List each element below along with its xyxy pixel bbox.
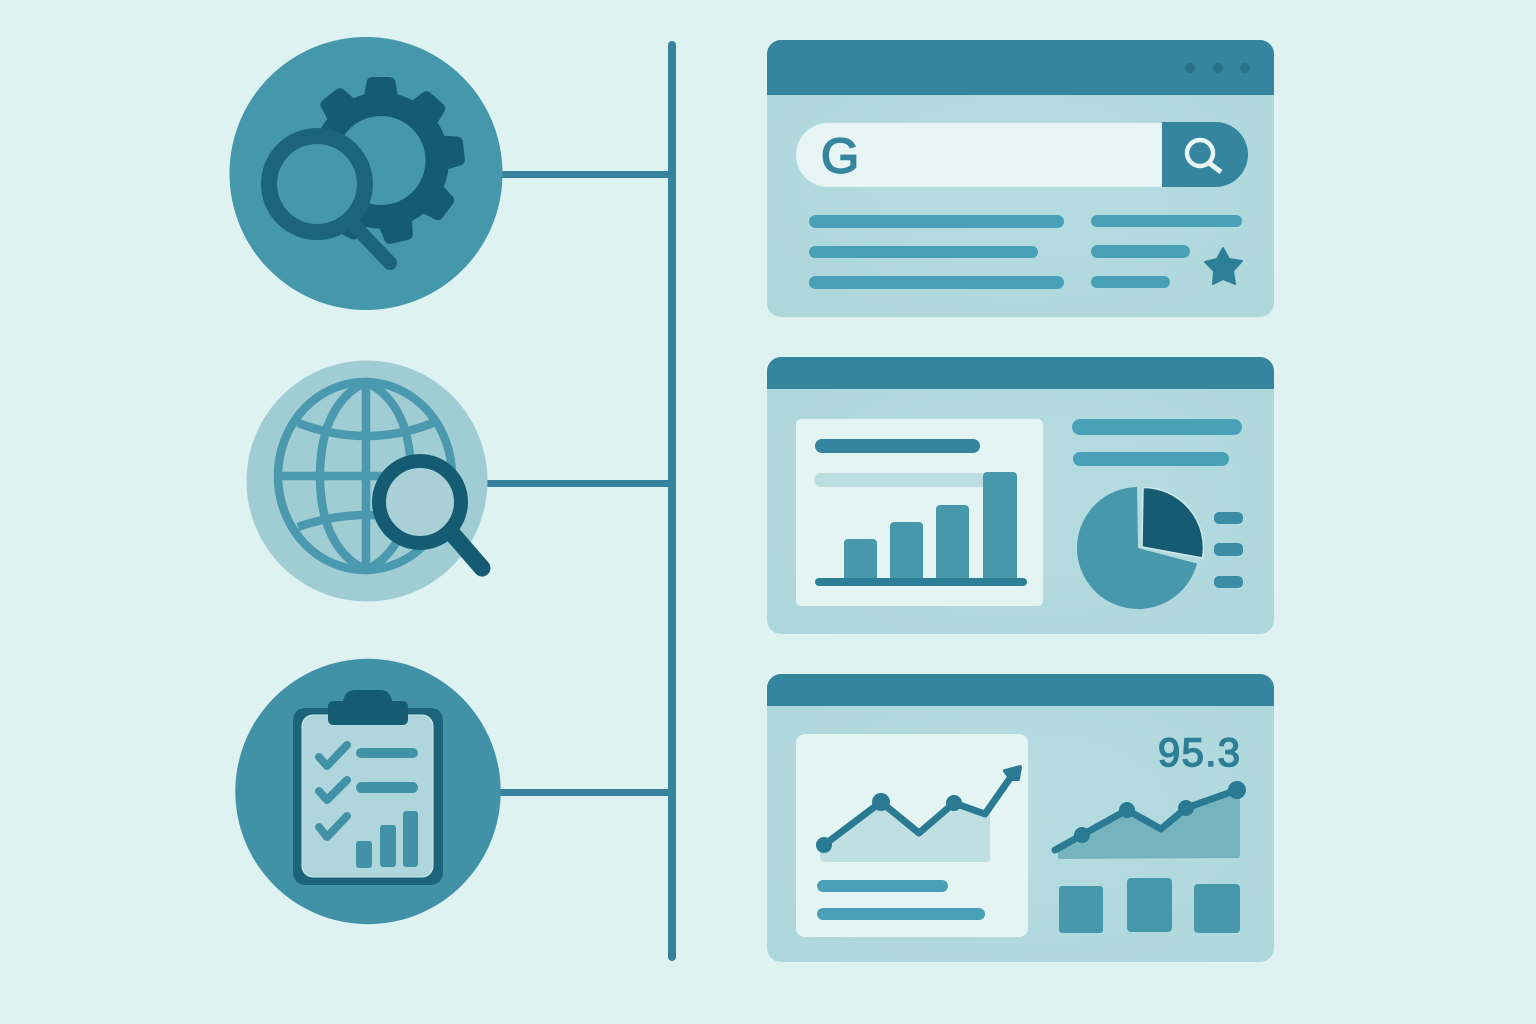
- search button: [1162, 122, 1248, 187]
- connector: top circle to spine: [500, 171, 670, 178]
- summary lines: [1072, 419, 1242, 466]
- checkmarks: [319, 745, 347, 837]
- area fill: [820, 802, 990, 862]
- clipboard paper: [302, 715, 433, 877]
- metric tiles: [1059, 878, 1240, 933]
- pie chart: [1077, 487, 1203, 609]
- icon: globe and magnifier circle: [246, 360, 488, 602]
- icon: globe: [278, 382, 452, 570]
- metric value: 95.3: [1158, 731, 1240, 775]
- search bar field: [796, 123, 1162, 187]
- panel: bar and pie chart window: [767, 357, 1274, 634]
- icon: gear: [313, 77, 466, 246]
- connector: middle circle to spine: [486, 480, 670, 487]
- bar chart card: [796, 419, 1043, 606]
- connector: bottom circle to spine: [498, 789, 670, 796]
- clipboard board: [293, 708, 443, 885]
- checklist lines: [356, 748, 418, 793]
- area chart: [1055, 781, 1246, 859]
- icon: clipboard checklist circle: [235, 659, 501, 924]
- window header bar: [767, 674, 1274, 706]
- window header bar: [767, 40, 1274, 95]
- window header bar: [767, 357, 1274, 389]
- panel: search window: [767, 40, 1274, 317]
- trend arrowhead: [1005, 767, 1020, 779]
- icon: search glass: [1187, 140, 1221, 172]
- bars: [844, 472, 1017, 580]
- line chart card: [796, 734, 1028, 937]
- data points: [816, 793, 962, 853]
- trend line: [824, 774, 1013, 845]
- chart axis: [815, 578, 1027, 586]
- card text lines: [817, 880, 985, 920]
- result lines right: [1091, 215, 1242, 288]
- clipboard bar chart: [356, 811, 418, 868]
- vertical timeline spine: [668, 41, 676, 961]
- icon: star: [1205, 248, 1242, 284]
- icon: magnifier over globe: [379, 461, 482, 568]
- clipboard clip: [328, 690, 408, 725]
- window dots: [1185, 63, 1250, 73]
- panel: trend dashboard window: [767, 674, 1274, 962]
- pie legend: [1214, 512, 1243, 588]
- card subtitle line: [814, 473, 987, 487]
- card title line: [815, 439, 980, 453]
- search logo letter: G: [821, 130, 859, 184]
- icon: gear and magnifier circle: [230, 37, 502, 310]
- result lines left: [809, 215, 1064, 289]
- icon: magnifier over gear: [269, 136, 390, 263]
